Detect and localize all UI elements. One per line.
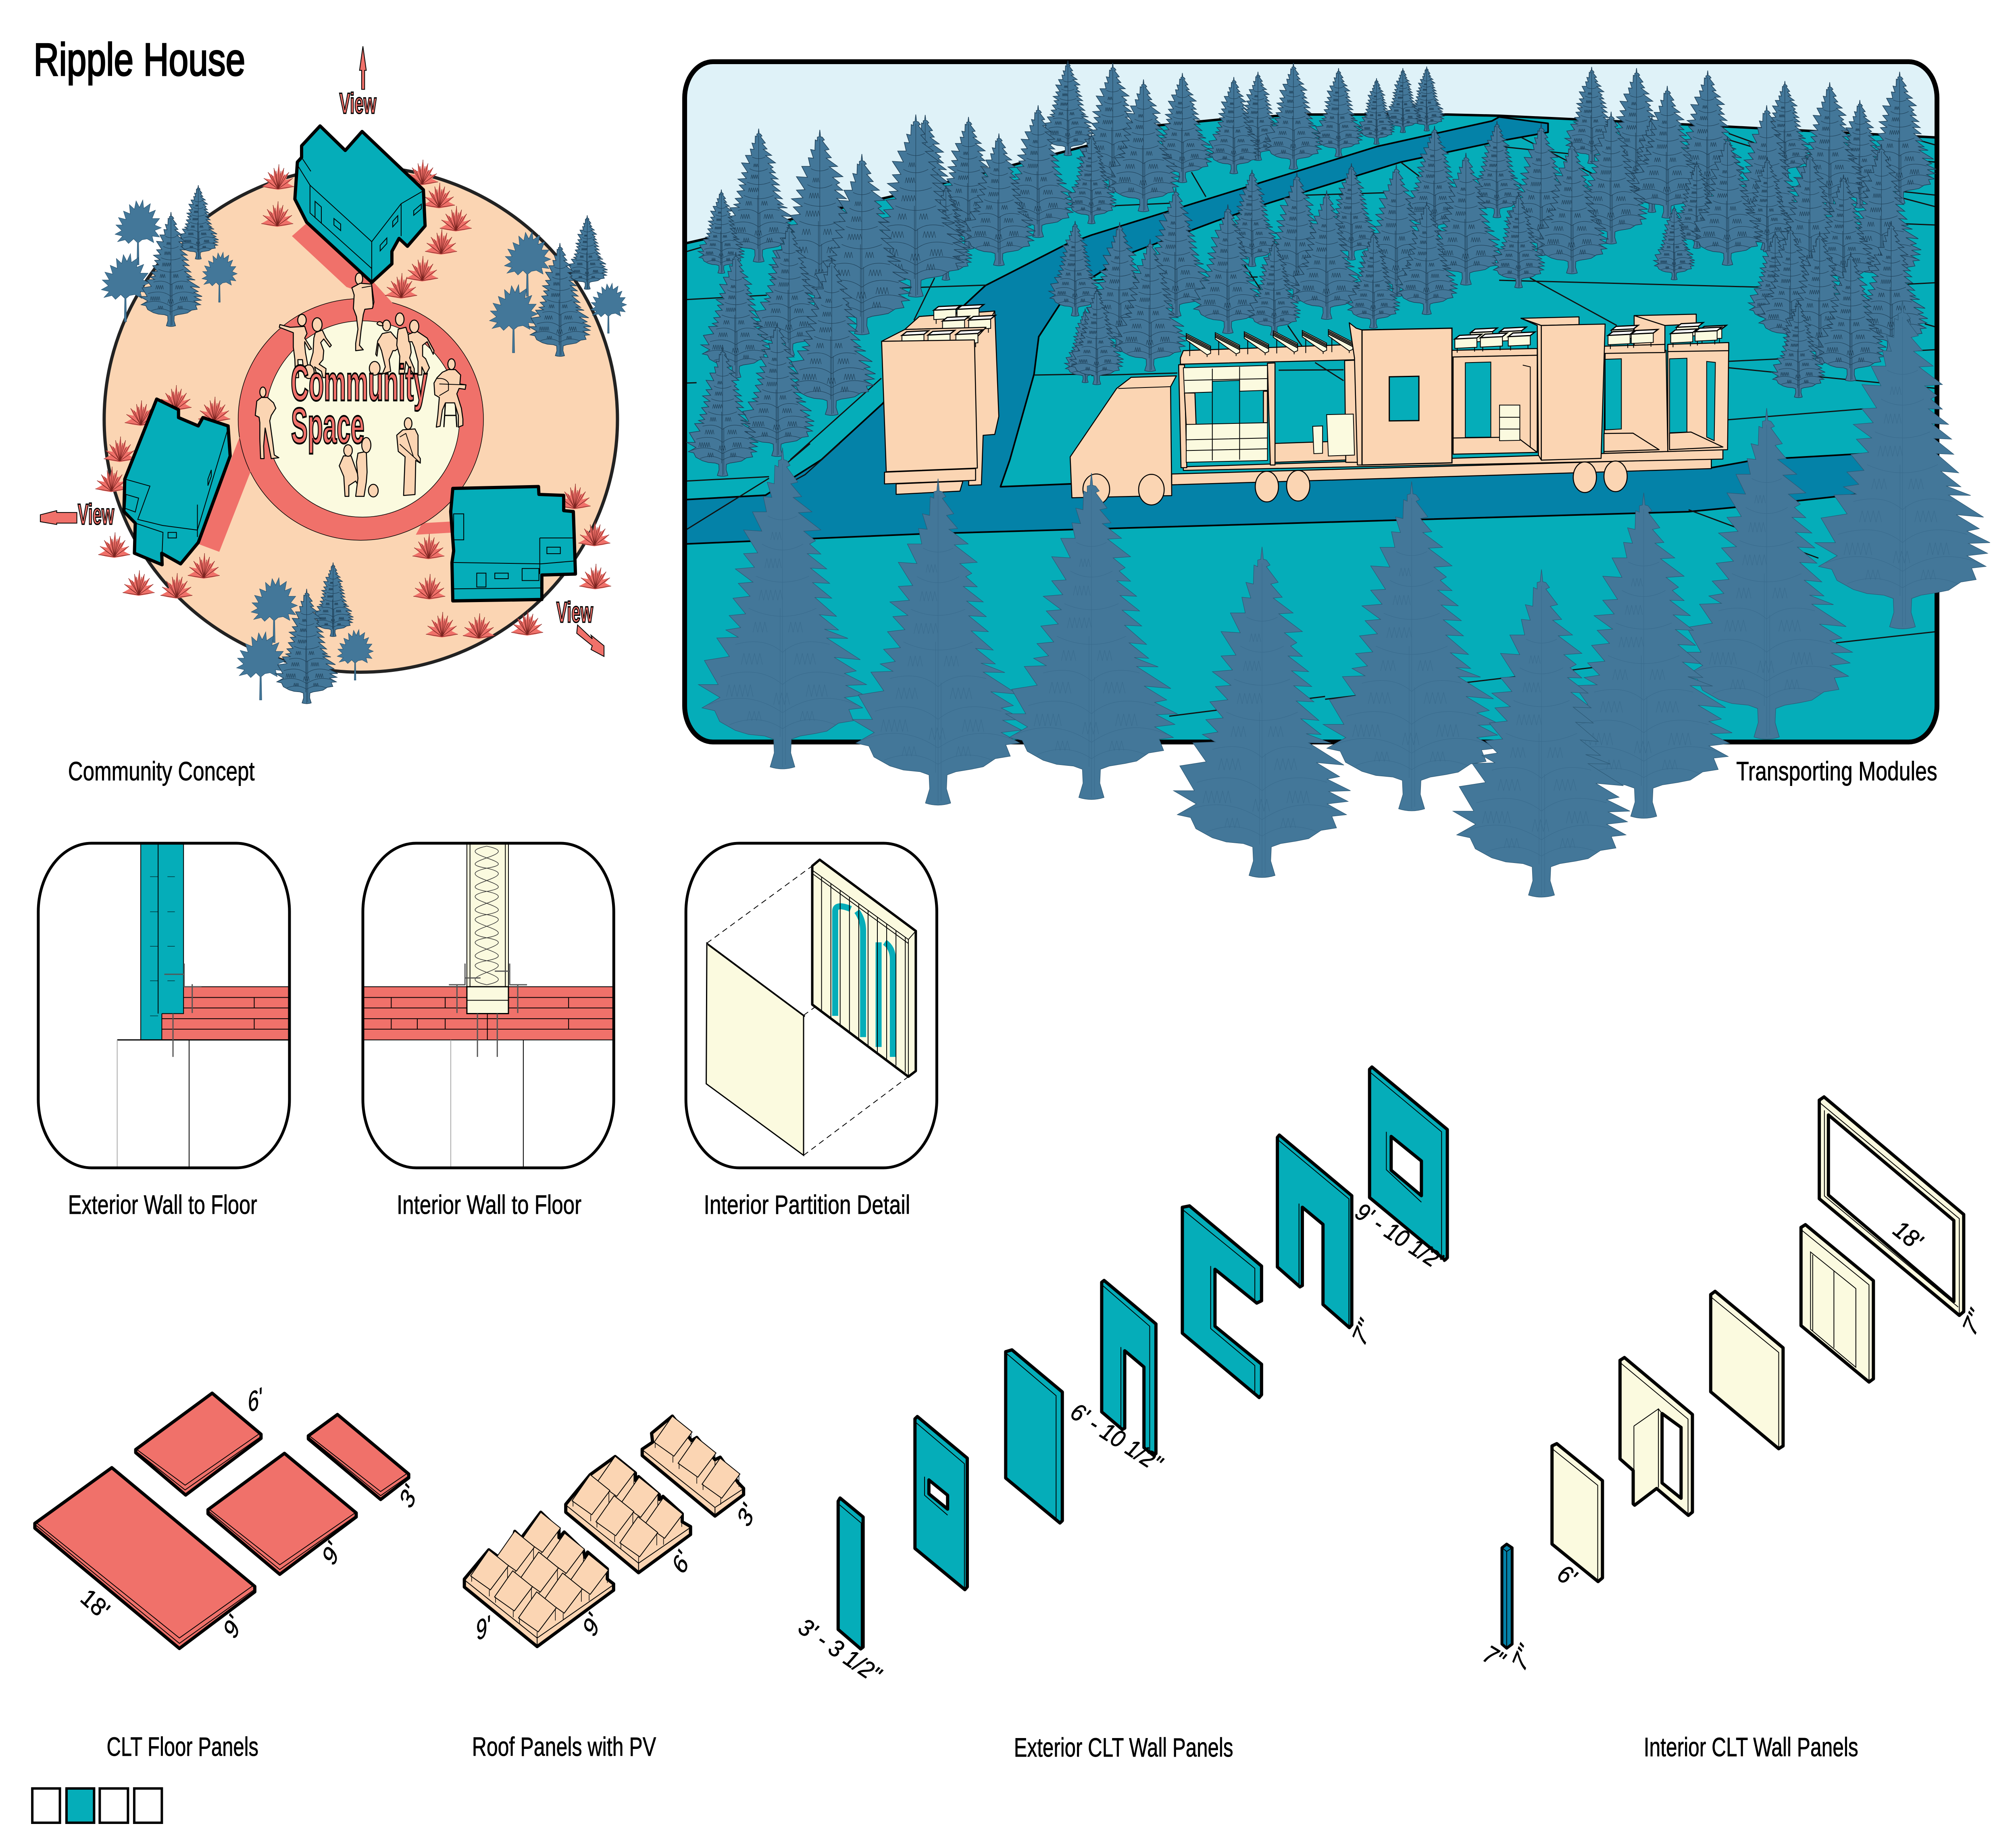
solar panels on bay one [1186,329,1353,357]
wall panel dimensions: 18' [1889,1215,1928,1256]
bay one frame and cream panels [1179,344,1358,468]
rear parapet behind bay four [1634,314,1696,345]
panel: transporting modules scene [685,60,1990,897]
plants [95,160,611,639]
roof module 6 by 9 [566,1456,691,1573]
community space label: Space [291,398,364,454]
view arrow: west: View [78,498,115,531]
floor panel 6 by 9 [136,1393,261,1495]
wall panel dimensions: 3' - 3 1/2" [794,1613,886,1690]
caption: interior partition detail: Interior Partition Detail [704,1190,910,1220]
figure: boy in hat [310,318,331,378]
truck cab and chassis [1070,376,1723,498]
panel: CLT floor panels [35,1381,423,1649]
foreground trees [698,300,1990,897]
site ellipses and paths [104,167,617,672]
wall panel dimensions: 7" [1958,1303,1988,1340]
truck with modules [1070,314,1729,505]
caption: transporting modules: Transporting Modules [1736,756,1937,786]
wall panel dimensions [1479,1215,1988,1676]
floor panel dimensions: 6' [246,1381,265,1419]
figure: boy kicking [279,315,312,378]
floor panel 18 by 9 [35,1467,255,1649]
panel: exterior CLT wall panels [794,1067,1451,1690]
panel: interior wall to floor detail [363,843,614,1169]
figure: woman with grocery bag [352,273,374,351]
roof module 9 by 9 [464,1512,614,1647]
floor panel dimensions [77,1381,423,1643]
panel: exterior wall to floor detail [38,843,292,1169]
tree clusters [101,185,627,704]
house: right [451,487,575,601]
landscape [685,62,1937,742]
figure: seated guitarist [434,359,466,427]
floor panel 9 by 9 [208,1453,356,1574]
wall panel dimensions: 7" [1479,1640,1510,1675]
section drawing [117,843,292,1169]
community space label: Community [291,355,427,411]
roof module 3 by 9 [642,1416,744,1516]
floor panel dimensions: 3' [394,1480,423,1513]
view arrow: north [339,46,377,120]
figure: standing man [255,387,279,459]
section drawing [363,843,614,1169]
panel frame [38,843,289,1168]
figure: girl with ponytail [376,320,400,374]
large wall panels [1349,317,1605,465]
panel frame [686,843,937,1168]
house: left [124,399,230,565]
community figures [255,273,466,497]
wall panel dimensions [794,1198,1451,1690]
wheels [1083,461,1627,505]
caption: interior CLT wall panels: Interior CLT Wall Panels [1644,1732,1858,1762]
view arrow: west [40,498,115,531]
panel: roof panels with PV [464,1416,760,1647]
view arrow: north: View [339,87,377,120]
wall panel dimensions: 7" [1347,1313,1377,1350]
bay two [1452,327,1537,454]
wall panel dimensions: 9' - 10 1/2" [1351,1198,1451,1278]
panel: interior partition detail [686,843,937,1168]
wall panel dimensions: 6' - 10 1/2" [1066,1398,1167,1478]
floor panel dimensions: 18' [77,1581,113,1626]
stacked modules on left [882,304,999,494]
figure: boy running [408,320,434,375]
view arrow: southeast [556,596,604,657]
caption: exterior CLT wall panels: Exterior CLT Wall Panels [1014,1732,1233,1763]
floor panel 3 by 9 [308,1415,409,1499]
wall panels [838,1067,1447,1649]
caption: exterior wall to floor: Exterior Wall to Floor [68,1190,257,1220]
bays three and four [1604,323,1729,453]
panel frame [363,843,614,1168]
caption: interior wall to floor: Interior Wall to Floor [397,1190,581,1220]
community space label [291,355,427,454]
roof panel dimensions: 9' [578,1608,606,1641]
figure: girl looking down [356,438,371,496]
figure: child with ball [339,445,364,496]
exploded partition [706,860,916,1155]
page indicator legend [32,1788,162,1823]
figure: tall girl [396,313,414,375]
figure: standing guitarist [397,418,420,496]
panel: interior CLT wall panels [1479,1097,1988,1676]
roof panel dimensions: 3' [732,1499,760,1531]
wall panel dimensions: 6' [1553,1559,1581,1592]
house: top [295,126,425,282]
roof panel dimensions [474,1499,760,1647]
view arrow: southeast: View [556,596,593,629]
wall panel dimensions: 7" [1507,1639,1537,1676]
background forest [687,60,1936,476]
panel: community concept site plan [40,46,627,704]
caption: CLT floor panels: CLT Floor Panels [106,1732,258,1762]
wall panels [1502,1097,1964,1648]
caption: community concept: Community Concept [68,756,255,786]
roof panel dimensions: 9' [474,1609,494,1647]
title: Ripple House [33,34,245,85]
roof panel dimensions: 6' [667,1546,696,1578]
caption: roof panels: Roof Panels with PV [472,1732,656,1762]
footballs [304,361,380,497]
scene frame [685,62,1937,742]
floor panel dimensions: 9' [219,1610,247,1643]
floor panel dimensions: 9' [317,1537,346,1569]
